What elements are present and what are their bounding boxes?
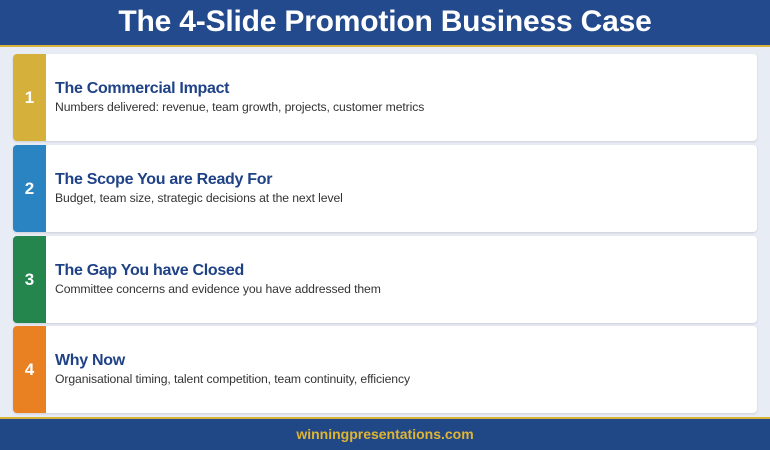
- number 4: 4: [25, 360, 34, 378]
- card 3: [13, 236, 757, 323]
- text 1: The Commercial Impact: [55, 80, 229, 97]
- title: The 4-Slide Promotion Business Case: [118, 5, 652, 38]
- number 3: [13, 236, 46, 323]
- card 4: [13, 326, 757, 413]
- card 2: [13, 145, 757, 232]
- text 4: Organisational timing, talent competition, team continuity, efficiency: [55, 372, 410, 386]
- number 4: [13, 326, 46, 413]
- text 3: The Gap You have Closed: [55, 262, 244, 279]
- text 1: [55, 80, 424, 114]
- footer: winningpresentations.com: [296, 426, 474, 442]
- title: [0, 0, 770, 47]
- card 1: [13, 54, 757, 141]
- text 2: [55, 171, 343, 205]
- number 1: [13, 54, 46, 141]
- text 3: Committee concerns and evidence you have addressed them: [55, 282, 381, 296]
- text 4: Why Now: [55, 352, 125, 369]
- number 2: 2: [25, 178, 34, 198]
- footer: [0, 417, 770, 450]
- number 2: [13, 145, 46, 232]
- number 1: 1: [25, 88, 34, 106]
- text 1: Numbers delivered: revenue, team growth, projects, customer metrics: [55, 100, 424, 114]
- text 4: [55, 352, 410, 386]
- text 2: Budget, team size, strategic decisions at the next level: [55, 191, 343, 205]
- text 2: The Scope You are Ready For: [55, 171, 272, 188]
- text 3: [55, 262, 381, 296]
- number 3: 3: [25, 270, 34, 288]
